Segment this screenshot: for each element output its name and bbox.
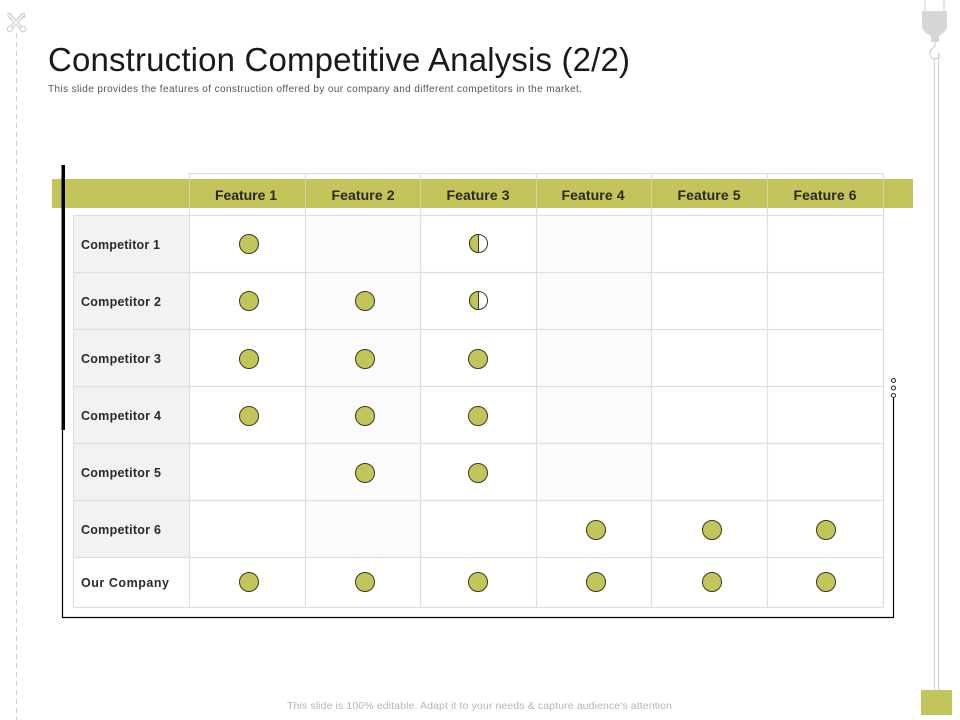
column headings: Feature 1: [215, 187, 277, 203]
frame end dots: [892, 378, 896, 398]
column headings: Feature 4: [562, 187, 625, 203]
row label shading: [74, 216, 189, 557]
filled feature markers: [240, 234, 836, 592]
footer note: This slide is 100% editable. Adapt it to your needs & capture audience's attention: [287, 700, 672, 712]
alternate column shading: [305, 216, 651, 557]
half feature marker: competitor 2: [470, 292, 488, 310]
column headings: Feature 6: [794, 187, 857, 203]
column headings: Feature 5: [678, 187, 741, 203]
row headings: Competitor 2: [81, 295, 161, 309]
column headings: Feature 3: [446, 187, 510, 203]
column headings: [215, 187, 857, 203]
left dashed guide line: [16, 33, 18, 720]
header cell dividers: [190, 179, 884, 208]
row headings: Competitor 6: [81, 523, 161, 537]
column headings: Feature 2: [332, 187, 395, 203]
subtitle: This slide provides the features of construction offered by our company and different competitors in the market.: [48, 84, 582, 95]
black frame bar: [62, 165, 65, 430]
row headings: Competitor 4: [81, 409, 161, 423]
header band: [52, 179, 913, 208]
title: Construction Competitive Analysis (2/2): [48, 41, 630, 78]
row headings: Competitor 1: [81, 238, 160, 252]
black frame line: [62, 398, 894, 618]
row headings: [81, 238, 169, 590]
comparison table: [52, 173, 913, 608]
row headings: Competitor 5: [81, 466, 161, 480]
half feature marker: competitor 1: [470, 234, 488, 252]
row headings: Competitor 3: [81, 352, 161, 366]
row headings: Our Company: [81, 576, 169, 590]
table grid: [74, 173, 884, 608]
icon: crane hook and cable: [922, 0, 947, 690]
icon: crossed tools: [7, 13, 26, 32]
icon: green square anchor: [921, 690, 952, 715]
